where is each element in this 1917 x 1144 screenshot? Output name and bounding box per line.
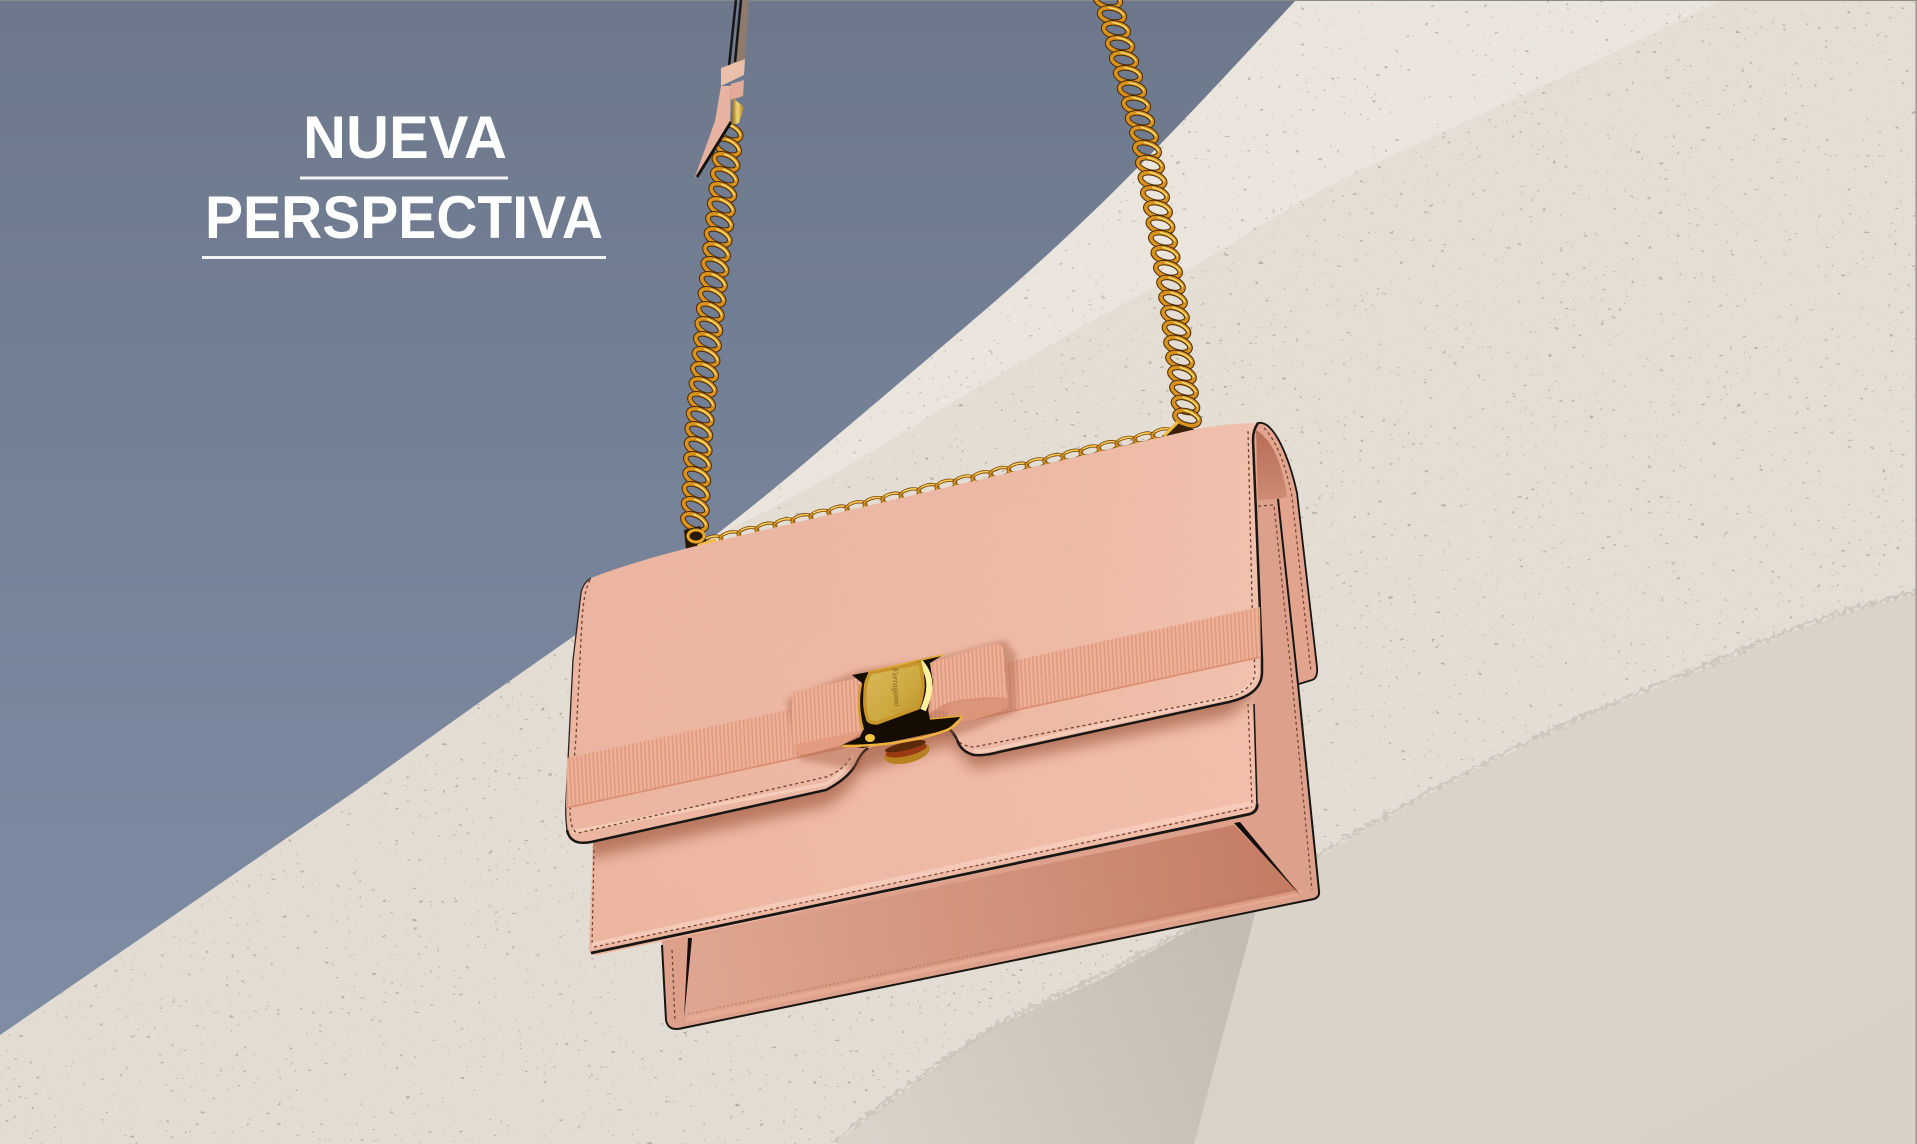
strap tail — [695, 86, 731, 177]
stone: light upper step — [700, 0, 1722, 532]
bag: clasp hinge disc — [882, 737, 932, 768]
keeper loops — [731, 80, 744, 100]
title — [202, 104, 606, 259]
bag: upper back gusset — [1250, 423, 1317, 690]
bag: gold clasp — [842, 655, 962, 748]
bag: gusset stitching — [672, 428, 1312, 1022]
handbag chain: left — [680, 120, 743, 534]
bag: black gusset slits — [1234, 822, 1301, 896]
bag: flap stitching — [570, 430, 1255, 833]
handbag — [560, 420, 1319, 1029]
bag: bow right loop — [930, 644, 1008, 725]
chain end fittings — [684, 422, 1194, 550]
bag: flap rim — [572, 668, 1257, 832]
gold ferrule — [731, 98, 744, 125]
stone: lower lit step — [835, 594, 1917, 1144]
clasp: engraved logo: Ferragamo — [890, 666, 903, 707]
bag: flap edge left — [566, 578, 591, 830]
bag: bow left loop — [792, 677, 865, 755]
clasp: matte plate — [865, 663, 923, 723]
clasp: highlights — [843, 716, 962, 746]
bag: bow shadow — [786, 640, 1016, 770]
bag: middle panel — [589, 680, 1257, 955]
handbag chain: top along flap — [701, 427, 1173, 548]
bag: inner base panel — [683, 825, 1300, 1018]
bag: ribbon band — [566, 607, 1261, 808]
bag: middle panel flap shadow — [592, 693, 1254, 864]
handbag chain: right — [1094, 0, 1201, 428]
bag: leather grain — [1206, 523, 1207, 808]
bag: gusset inner shadow — [1256, 430, 1287, 500]
leather strap with keepers — [695, 0, 749, 177]
bag: main back panel — [662, 499, 1319, 1029]
stone: bag shadow wedge — [835, 888, 1262, 1144]
stone: rough step edge — [833, 591, 1917, 1142]
title line: NUEVA: NUEVA — [303, 104, 507, 171]
blue sky panel — [0, 0, 1296, 1035]
title line: PERSPECTIVA: PERSPECTIVA — [205, 184, 603, 251]
bag: flap edge bottom and right — [567, 423, 1262, 843]
bag: middle panel rim and stitching — [592, 803, 1252, 945]
bag: front flap — [566, 423, 1262, 843]
